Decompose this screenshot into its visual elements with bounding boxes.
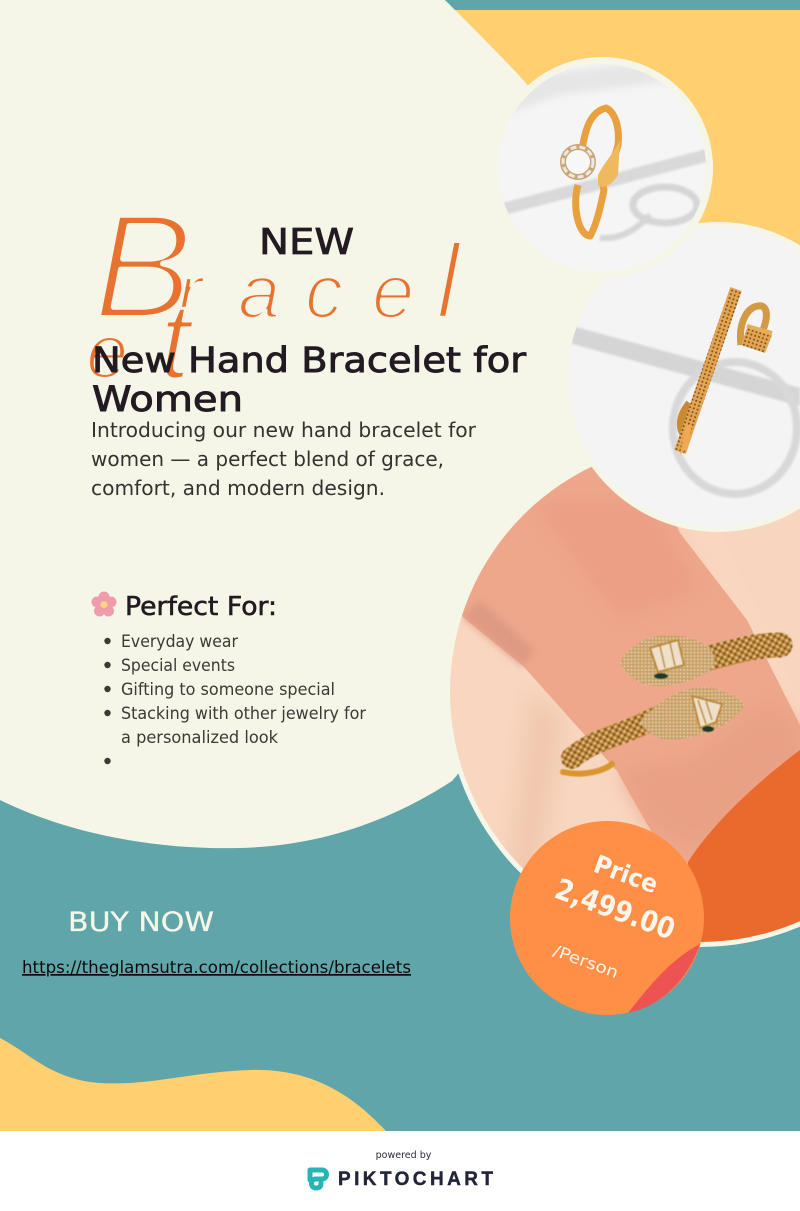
photo circle: snake bracelet on arm [450, 466, 800, 947]
intro paragraph [91, 418, 477, 500]
yellow top right panel [445, 10, 800, 570]
yellow bottom wave [0, 1038, 386, 1131]
bullet list: Special events [121, 656, 235, 676]
wordmark: PIKTOCHART [338, 1169, 493, 1190]
price unit: /Person [551, 941, 621, 982]
call to action: BUY NOW: BUY NOW [68, 907, 214, 938]
script word: Bracelet: e [372, 250, 414, 335]
price amount: 2,499.00 [551, 872, 680, 946]
title [92, 341, 527, 420]
script word: Bracelet: l [436, 223, 462, 341]
product link: https://theglamsutra.com/collections/bracelets [22, 958, 411, 978]
photo circle: mesh cuff bangle [560, 220, 800, 532]
icon: cherry blossom [92, 592, 116, 616]
script word: Bracelet: a [238, 250, 280, 335]
title: Women [92, 380, 243, 420]
script word: Bracelet: e [86, 310, 128, 395]
script word: Bracelet: c [305, 250, 343, 335]
badge peeled corner [628, 944, 700, 1013]
bullet list: Everyday wear [121, 632, 238, 652]
price badge [510, 821, 704, 1015]
snake upper [620, 635, 780, 686]
snake lower [563, 687, 744, 774]
script word: Bracelet: r [177, 250, 205, 335]
photo circle: bangle with crystal ring [490, 57, 715, 280]
arm [462, 466, 800, 864]
heading: NEW: NEW [259, 222, 354, 263]
icon: Piktochart logo [310, 1170, 326, 1188]
bullet list: Gifting to someone special [121, 680, 335, 700]
cream organic panel [0, 0, 620, 848]
bullet list: a personalized look [121, 728, 278, 748]
heading: Perfect For: Perfect For: [125, 592, 277, 622]
script word: Bracelet: t [160, 280, 194, 401]
intro paragraph: women — a perfect blend of grace, [91, 447, 444, 471]
footer: powered by Piktochart [0, 1131, 800, 1211]
script word: Bracelet: B [93, 182, 193, 350]
footer: powered by Piktochart: powered by [376, 1150, 432, 1161]
script word: Bracelet [86, 182, 462, 401]
price label: Price [590, 849, 662, 899]
title: New Hand Bracelet for [92, 341, 527, 381]
top teal strip [445, 0, 800, 10]
bullet list: Stacking with other jewelry for [121, 704, 366, 724]
sleeve [688, 750, 800, 950]
intro paragraph: comfort, and modern design. [91, 476, 385, 500]
bullet list [104, 632, 366, 764]
intro paragraph: Introducing our new hand bracelet for [91, 418, 477, 442]
